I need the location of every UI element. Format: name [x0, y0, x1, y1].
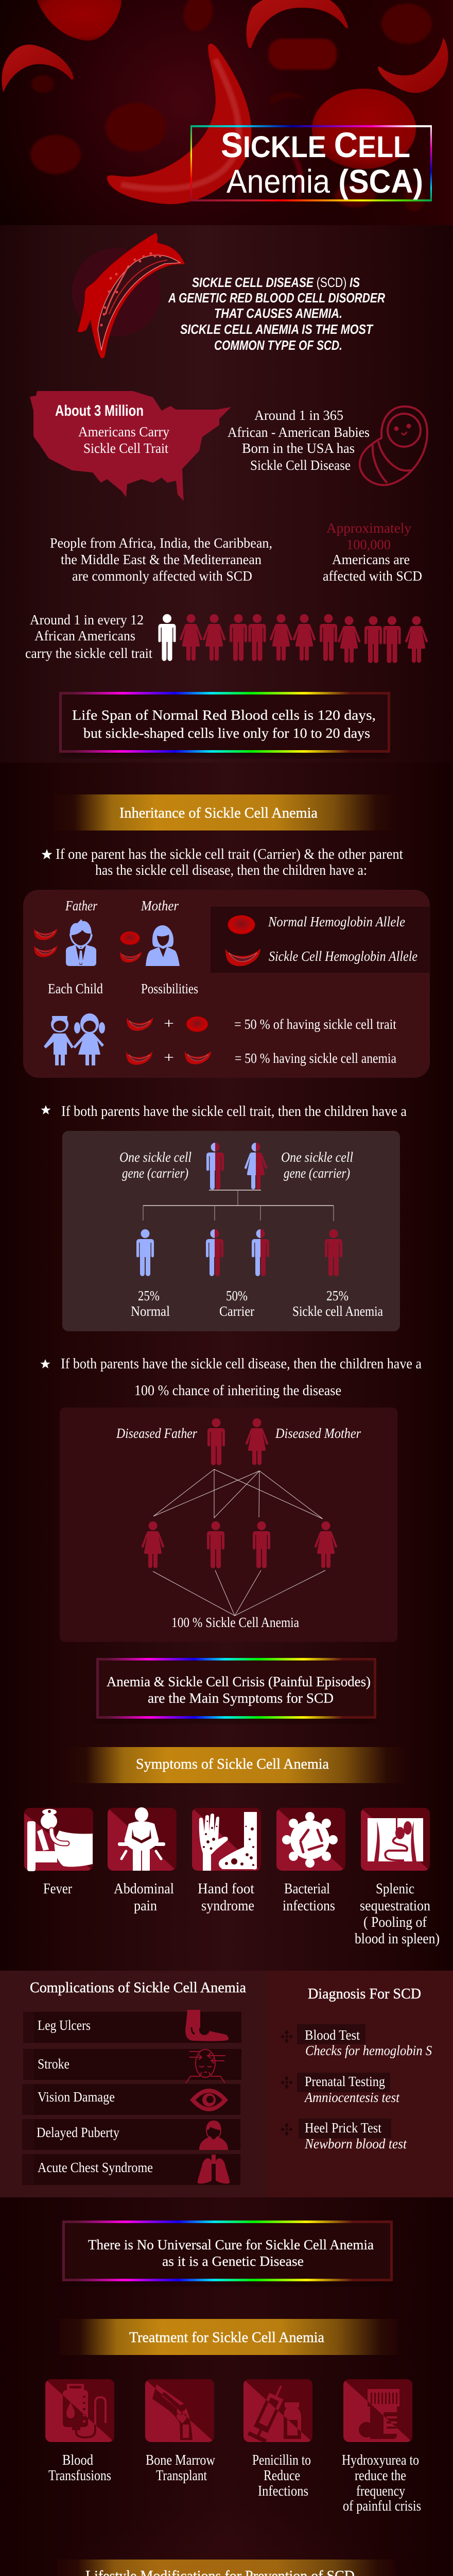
callout: main symptoms: Anemia & Sickle Cell Crisis (Painful Episodes) [107, 1674, 371, 1689]
scenario 1 text [42, 846, 403, 878]
outcome row 2: = 50 % having sickle cell anemia [235, 1050, 396, 1066]
family tree lines [143, 1190, 334, 1221]
USA map stat: Americans Carry [78, 424, 169, 439]
intro text: SICKLE CELL ANEMIA IS THE MOST [180, 321, 374, 337]
panel: one carrier parent [23, 890, 430, 1078]
panel: diagnosis: Diagnosis For SCD [308, 1986, 421, 2002]
babies stat text: Born in the USA has [242, 440, 355, 456]
panel: diagnosis [267, 1971, 453, 2197]
symptom: splenic sequestration: Splenic [376, 1880, 414, 1897]
outcome row 2 [126, 1049, 396, 1066]
hero banner [0, 0, 453, 225]
scenario 3 text: 100 % chance of inheriting the disease [134, 1382, 341, 1399]
carrier parents [206, 1143, 267, 1190]
panel: both carriers [62, 1131, 400, 1331]
babies stat text [228, 408, 370, 473]
section heading: treatment [60, 2319, 398, 2355]
panel: both carriers: 25% [138, 1288, 160, 1303]
symptom: splenic sequestration [355, 1808, 440, 1947]
treatment: bone marrow transplant: Transplant [156, 2467, 207, 2484]
callout: life span: Life Span of Normal Red Blood cells is 120 days, [72, 707, 376, 723]
legend: Sickle Cell Hemoglobin Allele [269, 948, 417, 964]
affected regions text: are commonly affected with SCD [72, 568, 252, 584]
title [221, 125, 423, 200]
symptom: hand foot syndrome: Hand foot [198, 1880, 254, 1897]
panel: both diseased: Diseased Mother [275, 1426, 361, 1441]
sickle cells [2, 0, 448, 93]
outcome row 1: = 50 % of having sickle cell trait [234, 1016, 396, 1032]
1 in 12 text [25, 612, 152, 661]
panel: both carriers: 50% [226, 1288, 248, 1303]
inheritance lines [153, 1469, 325, 1616]
diagnosis: prenatal testing: Amniocentesis test [304, 2090, 400, 2105]
row: vision damage: Vision Damage [38, 2089, 115, 2105]
row: stroke: Stroke [38, 2056, 69, 2072]
panel: one carrier parent: Mother [141, 898, 179, 913]
legend [211, 907, 430, 973]
title frame [190, 125, 432, 201]
icon: children [44, 1013, 105, 1065]
1 in 12 text: Around 1 in every 12 [30, 612, 144, 628]
large red cell top-left [36, 0, 121, 41]
row: acute chest syndrome [22, 2154, 240, 2185]
1 in 12 text: African Americans [34, 628, 135, 643]
callout: life span: but sickle-shaped cells live only for 10 to 20 days [83, 725, 370, 741]
panel: both diseased: Diseased Father [116, 1426, 197, 1441]
scenario 1 text: If one parent has the sickle cell trait (Carrier) & the other parent [56, 846, 403, 862]
callout: no universal cure [62, 2221, 393, 2284]
section heading: symptoms [66, 1747, 404, 1783]
diagnosis: heel prick: Newborn blood test [304, 2136, 407, 2151]
panel: complications: Complications of Sickle Cell Anemia [30, 1979, 246, 1996]
panel: both carriers: gene (carrier) [284, 1165, 350, 1181]
panel: both carriers: One sickle cell [119, 1149, 191, 1165]
intro text: SICKLE CELL DISEASE (SCD) IS [192, 275, 360, 290]
callout: no universal cure: There is No Universal Cure for Sickle Cell Anemia [88, 2237, 374, 2252]
diagnosis: blood test [281, 2024, 432, 2058]
icon: swaddled baby [360, 406, 427, 485]
approximately 100,000 stat: affected with SCD [323, 568, 422, 584]
scenario 1 text: has the sickle cell disease, then the children have a: [95, 862, 367, 878]
treatment: blood transfusions: Transfusions [48, 2467, 111, 2484]
panel: both carriers: gene (carrier) [122, 1165, 188, 1181]
babies stat text: Around 1 in 365 [254, 408, 343, 423]
diagnosis: blood test: Blood Test [305, 2027, 360, 2043]
panel: both carriers: 25% [326, 1288, 349, 1303]
section heading: inheritance: Inheritance of Sickle Cell Anemia [119, 805, 318, 821]
treatment: blood transfusions: Blood [62, 2452, 93, 2468]
intro text: THAT CAUSES ANEMIA. [214, 306, 342, 321]
panel: both carriers: One sickle cell [281, 1149, 353, 1165]
treatment: bone marrow transplant: Bone Marrow [146, 2452, 215, 2468]
panel: both diseased: 100 % Sickle Cell Anemia [171, 1615, 299, 1630]
symptom: abdominal pain: pain [134, 1897, 157, 1914]
diagnosis: prenatal testing [281, 2073, 400, 2105]
babies stat text: African - American Babies [228, 425, 370, 440]
treatment: penicillin: Infections [258, 2483, 308, 2499]
panel: both carriers: Sickle cell Anemia [292, 1303, 383, 1319]
treatment: penicillin: Reduce [264, 2467, 300, 2484]
diagnosis: blood test: Checks for hemoglobin S [305, 2043, 432, 2058]
main large sickle cell [107, 44, 251, 204]
approximately 100,000 stat: Americans are [332, 552, 410, 567]
diagnosis: heel prick [281, 2119, 407, 2151]
affected children [142, 1521, 337, 1568]
panel: one carrier parent: Each Child [48, 981, 103, 996]
intro text: A GENETIC RED BLOOD CELL DISORDER [168, 290, 385, 306]
symptom: splenic sequestration: sequestration [360, 1897, 430, 1914]
panel: complications [0, 1971, 267, 2197]
section heading: lifestyle [57, 2560, 395, 2576]
diagnosis: heel prick: Heel Prick Test [305, 2120, 381, 2136]
section heading: inheritance [54, 794, 393, 831]
row: delayed puberty: Delayed Puberty [37, 2125, 119, 2140]
parent alleles [34, 928, 142, 962]
treatment: hydroxyurea: frequency [356, 2483, 405, 2499]
row: delayed puberty [22, 2119, 240, 2150]
scenario 3 text [40, 1355, 422, 1399]
symptom: abdominal pain [108, 1807, 177, 1914]
treatment: blood transfusions [45, 2379, 114, 2484]
symptom: hand foot syndrome: syndrome [201, 1897, 254, 1914]
symptom: splenic sequestration: ( Pooling of [363, 1914, 427, 1930]
treatment: hydroxyurea: Hydroxyurea to [342, 2452, 419, 2468]
treatment: hydroxyurea: of painful crisis [343, 2498, 421, 2514]
panel: one carrier parent: Father [65, 898, 97, 913]
affected regions text: the Middle East & the Mediterranean [61, 552, 262, 567]
diseased parents [207, 1418, 268, 1465]
symptom: fever: Fever [43, 1880, 72, 1897]
title: SICKLE CELL [221, 125, 410, 165]
callout: no universal cure: as it is a Genetic Disease [162, 2253, 304, 2269]
section heading: treatment: Treatment for Sickle Cell Anemia [129, 2329, 324, 2346]
icon: father [66, 919, 96, 966]
row: acute chest syndrome: Acute Chest Syndrome [38, 2160, 153, 2175]
outcome row 1 [127, 1015, 396, 1032]
symptom: bacterial infections: Bacterial [284, 1880, 330, 1897]
scenario 2 text: If both parents have the sickle cell trait, then the children have a [61, 1103, 407, 1120]
treatment: hydroxyurea [342, 2379, 421, 2514]
row: leg ulcers [23, 2010, 241, 2043]
babies stat text: Sickle Cell Disease [250, 457, 351, 473]
affected regions text [50, 535, 272, 584]
symptom: splenic sequestration: blood in spleen) [355, 1930, 440, 1947]
symptom: bacterial infections: infections [283, 1897, 335, 1914]
outcome row 2: + [164, 1049, 174, 1066]
title: Anemia (SCA) [226, 163, 423, 200]
diagnosis: prenatal testing: Prenatal Testing [305, 2074, 385, 2089]
legend: Normal Hemoglobin Allele [268, 914, 405, 929]
USA map stat: Sickle Cell Trait [83, 440, 168, 456]
1 in 12 text: carry the sickle cell trait [25, 646, 152, 661]
icon: mother [146, 925, 180, 966]
treatment: bone marrow transplant [145, 2379, 215, 2484]
callout: main symptoms: are the Main Symptoms for SCD [148, 1690, 334, 1706]
USA map stat: About 3 Million [55, 402, 144, 419]
treatment: penicillin: Penicillin to [252, 2452, 311, 2468]
symptom: fever [24, 1808, 93, 1897]
children outcomes [136, 1229, 342, 1276]
intro sickle illustration [72, 233, 185, 358]
panel: both carriers: Normal [131, 1303, 170, 1319]
USA map stat [30, 391, 231, 501]
symptom: abdominal pain: Abdominal [114, 1880, 174, 1897]
treatment: penicillin [243, 2379, 312, 2499]
row: vision damage [22, 2084, 240, 2115]
affected regions text: People from Africa, India, the Caribbean, [50, 535, 272, 551]
intro text [168, 275, 385, 353]
treatment: hydroxyurea: reduce the [355, 2467, 406, 2484]
panel: both diseased [60, 1408, 397, 1642]
row: stroke [23, 2049, 241, 2083]
approximately 100,000 stat: 100,000 [346, 537, 391, 552]
large red cell right [312, 89, 416, 169]
section heading: symptoms: Symptoms of Sickle Cell Anemia [136, 1756, 329, 1772]
outcome row 1: + [164, 1015, 174, 1032]
approximately 100,000 stat [323, 520, 422, 584]
panel: one carrier parent: Possibilities [141, 981, 198, 996]
approximately 100,000 stat: Approximately [326, 520, 411, 536]
panel: both carriers: Carrier [219, 1303, 254, 1319]
scenario 3 text: If both parents have the sickle cell disease, then the children have a [61, 1355, 422, 1372]
intro text: COMMON TYPE OF SCD. [214, 337, 342, 353]
symptom: hand foot syndrome [192, 1808, 261, 1914]
symptom: bacterial infections [276, 1808, 345, 1914]
callout: main symptoms [96, 1658, 376, 1722]
callout: life span [59, 692, 390, 756]
row: leg ulcers: Leg Ulcers [38, 2018, 91, 2033]
pictogram: 1 in 12 people [159, 614, 428, 663]
